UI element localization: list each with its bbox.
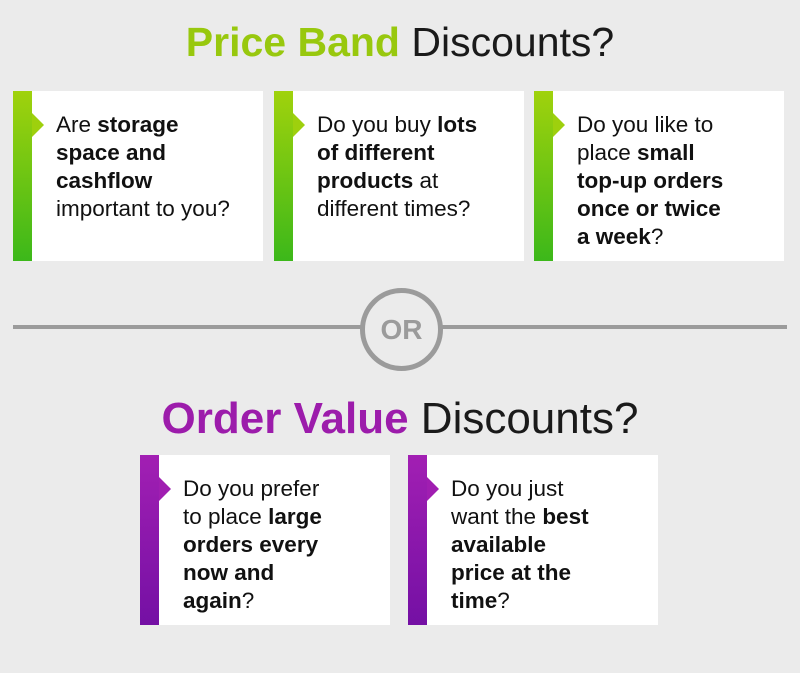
card: large orders: Do you prefer: [183, 476, 319, 501]
card: large orders: [140, 455, 390, 625]
card: large orders: again?: [183, 588, 254, 613]
card: large orders: now and: [183, 560, 274, 585]
card: best price: want the best: [451, 504, 589, 529]
divider with OR: OR: [380, 314, 422, 345]
card: storage: cashflow: [56, 168, 152, 193]
card: lots of products: [274, 91, 524, 261]
card: best price: price at the: [451, 560, 571, 585]
card: lots of products: of different: [317, 140, 434, 165]
card: best price: [408, 455, 658, 625]
card: best price: Do you just: [451, 476, 564, 501]
card: best price: available: [451, 532, 546, 557]
card: large orders: orders every: [183, 532, 318, 557]
card: small orders: Do you like to: [577, 112, 713, 137]
card: storage: [13, 91, 263, 261]
card: small orders: once or twice: [577, 196, 721, 221]
card: storage: space and: [56, 140, 166, 165]
card: small orders: top-up orders: [577, 168, 723, 193]
card: best price: time?: [451, 588, 510, 613]
card: small orders: [534, 91, 784, 261]
divider with OR: [13, 288, 787, 371]
card: lots of products: products at: [317, 168, 438, 193]
card: lots of products: Do you buy lots: [317, 112, 477, 137]
card: lots of products: different times?: [317, 196, 470, 221]
title: order value: Order Value Discounts?: [162, 394, 638, 443]
card: small orders: place small: [577, 140, 695, 165]
card: storage: Are storage: [56, 112, 179, 137]
title: price band: Price Band Discounts?: [186, 19, 614, 65]
card: small orders: a week?: [577, 224, 663, 249]
card: large orders: to place large: [183, 504, 322, 529]
card: storage: important to you?: [56, 196, 230, 221]
